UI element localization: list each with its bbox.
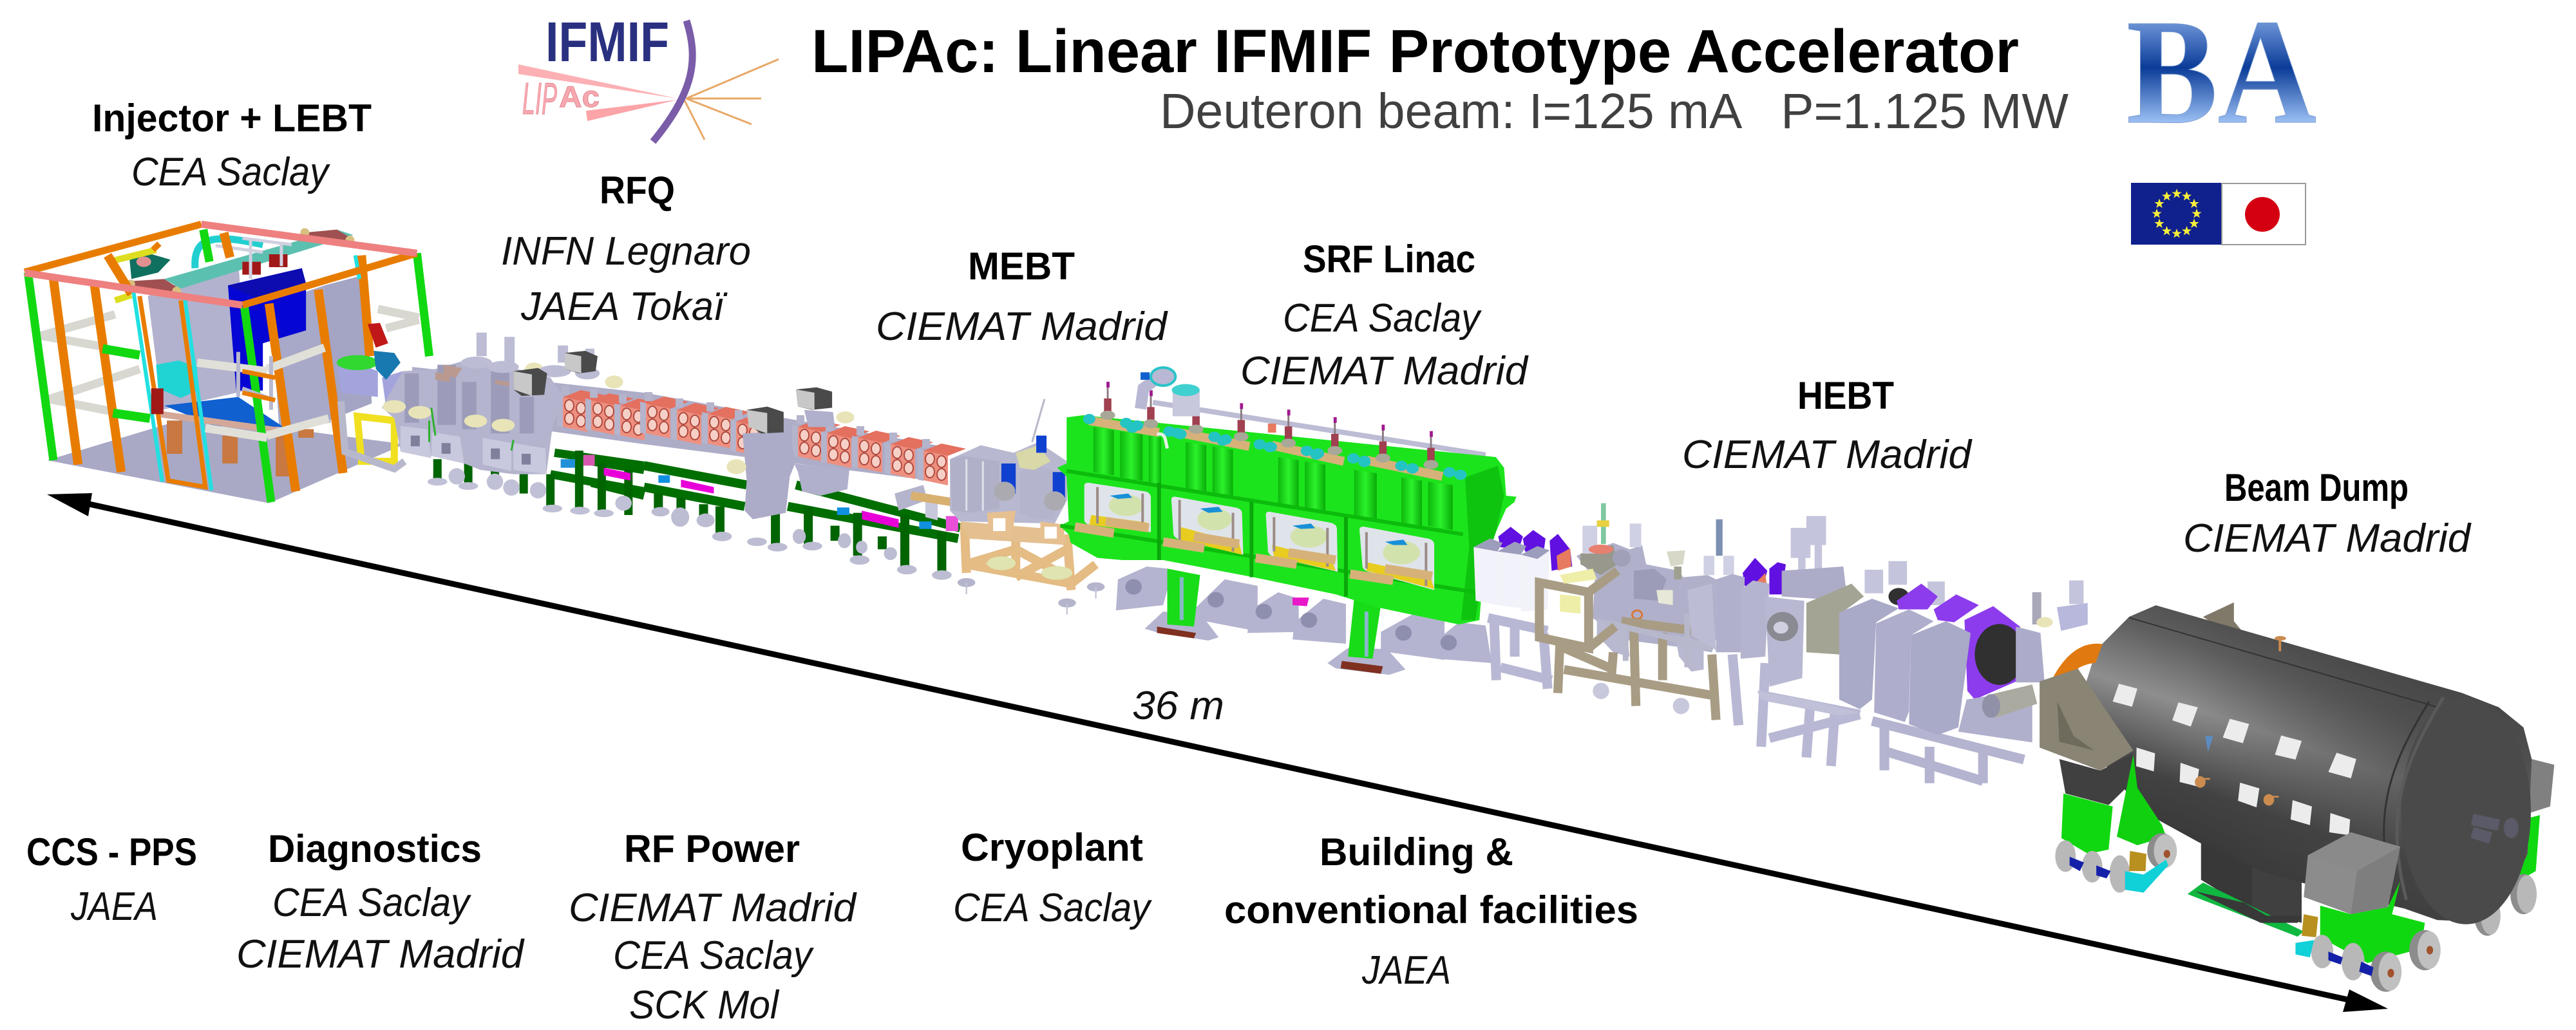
label: MEBT — [876, 245, 1169, 349]
label: Cryoplant — [953, 826, 1153, 930]
label: RF Power: CEA Saclay — [613, 933, 815, 978]
label: Beam Dump: Beam Dump — [2224, 466, 2409, 509]
valves — [461, 333, 600, 379]
label: Beam Dump: CIEMAT Madrid — [2183, 516, 2472, 561]
green body — [1057, 415, 1517, 624]
dark green frame — [551, 453, 644, 496]
end-cap pipes — [2472, 818, 2519, 838]
label: Building and conventional facilities — [1224, 830, 1638, 993]
label: MEBT: MEBT — [968, 245, 1075, 288]
label: HEBT — [1682, 374, 1973, 477]
lavender supports — [1116, 566, 1492, 675]
windows — [1084, 483, 1434, 590]
left green trolley — [2061, 794, 2113, 854]
label: 36 m: 36 m — [1132, 684, 1224, 728]
second group — [1687, 584, 1716, 650]
label: Injector + LEBT: Injector + LEBT — [92, 97, 372, 140]
label: RFQ — [501, 169, 751, 329]
label: Building and conventional facilities: JAEA — [1361, 948, 1451, 993]
label: SRF Linac — [1240, 238, 1530, 393]
RFQ vacuum stands and first support frame — [382, 333, 644, 517]
label: RF Power: RF Power — [624, 827, 800, 870]
label: MEBT: CIEMAT Madrid — [876, 304, 1169, 349]
copper knobs — [2195, 636, 2286, 805]
MEBT tan stand — [964, 523, 1096, 590]
logo: IFMIF LIPAc — [518, 11, 779, 142]
RFQ body band and modules — [412, 367, 966, 485]
RFQ modules — [557, 386, 966, 485]
label: Injector + LEBT: CEA Saclay — [131, 150, 331, 194]
label: Beam Dump — [2183, 466, 2472, 561]
back wheels and box — [2462, 759, 2554, 936]
lavender mass — [382, 359, 564, 474]
central beamline — [1577, 543, 1716, 652]
bracket — [2040, 668, 2134, 771]
SRF Linac cryomodule — [1057, 368, 1517, 675]
label: Diagnostics: CEA Saclay — [272, 881, 472, 925]
label: SRF Linac: SRF Linac — [1303, 238, 1475, 281]
logo: IFMIF LIPAc: Ac — [559, 80, 600, 113]
pumps — [1791, 516, 1945, 605]
label: CCS - PPS — [26, 830, 197, 929]
accelerator 3D model — [24, 224, 2554, 992]
quadrupole boxes — [1473, 539, 1549, 612]
copper tubes — [1075, 420, 1443, 581]
label: CCS - PPS: JAEA — [70, 885, 158, 929]
label: HEBT: HEBT — [1797, 374, 1894, 417]
white plates — [2113, 684, 2356, 835]
label: RF Power: CIEMAT Madrid — [569, 886, 858, 930]
distance arrow: 36 m — [47, 493, 2388, 1012]
magnets — [513, 351, 598, 396]
label: RFQ: JAEA Tokaï — [520, 285, 728, 329]
label: Cryoplant: CEA Saclay — [953, 886, 1153, 930]
label: RFQ: RFQ — [600, 169, 675, 212]
label: Diagnostics — [236, 827, 526, 977]
ribs — [1094, 427, 1453, 530]
label: Cryoplant: Cryoplant — [961, 826, 1143, 869]
title: LIPAc: Linear IFMIF Prototype Accelerator — [811, 17, 2019, 86]
label: Building and conventional facilities: Building & — [1320, 830, 1513, 874]
rail — [1153, 402, 1486, 455]
label: CCS - PPS: CCS - PPS — [26, 830, 197, 874]
top instrumentation — [1083, 382, 1466, 480]
label: Injector + LEBT — [92, 97, 372, 194]
LEBT — [337, 365, 378, 397]
injector frame and LEBT — [24, 224, 430, 503]
RFQ second half and MEBT — [644, 388, 1104, 615]
label: Diagnostics: CIEMAT Madrid — [236, 932, 526, 977]
label: RFQ: INFN Legnaro — [501, 229, 751, 274]
subtitle: beam parameters: Deuteron beam: I=125 mA P=1.125 MW — [1160, 84, 2069, 139]
label: SRF Linac: CEA Saclay — [1283, 296, 1482, 341]
Beam Dump tank — [2040, 603, 2554, 992]
label: SRF Linac: CIEMAT Madrid — [1240, 349, 1530, 393]
lavender stand under first quads — [1488, 618, 1551, 689]
right box and trolley — [2320, 881, 2425, 963]
HEBT — [1473, 503, 2088, 783]
logo: IFMIF LIPAc: LIP — [522, 73, 557, 124]
logo: IFMIF LIPAc: IFMIF — [545, 11, 669, 73]
cavities — [1089, 487, 1434, 589]
label: HEBT: CIEMAT Madrid — [1682, 433, 1973, 477]
flags: EU and Japan — [2131, 183, 2306, 245]
label: RF Power — [569, 827, 858, 1027]
label: Diagnostics: Diagnostics — [268, 827, 482, 870]
label: RF Power: SCK Mol — [629, 983, 780, 1027]
label: Building and conventional facilities: conventional facilities — [1224, 888, 1638, 932]
